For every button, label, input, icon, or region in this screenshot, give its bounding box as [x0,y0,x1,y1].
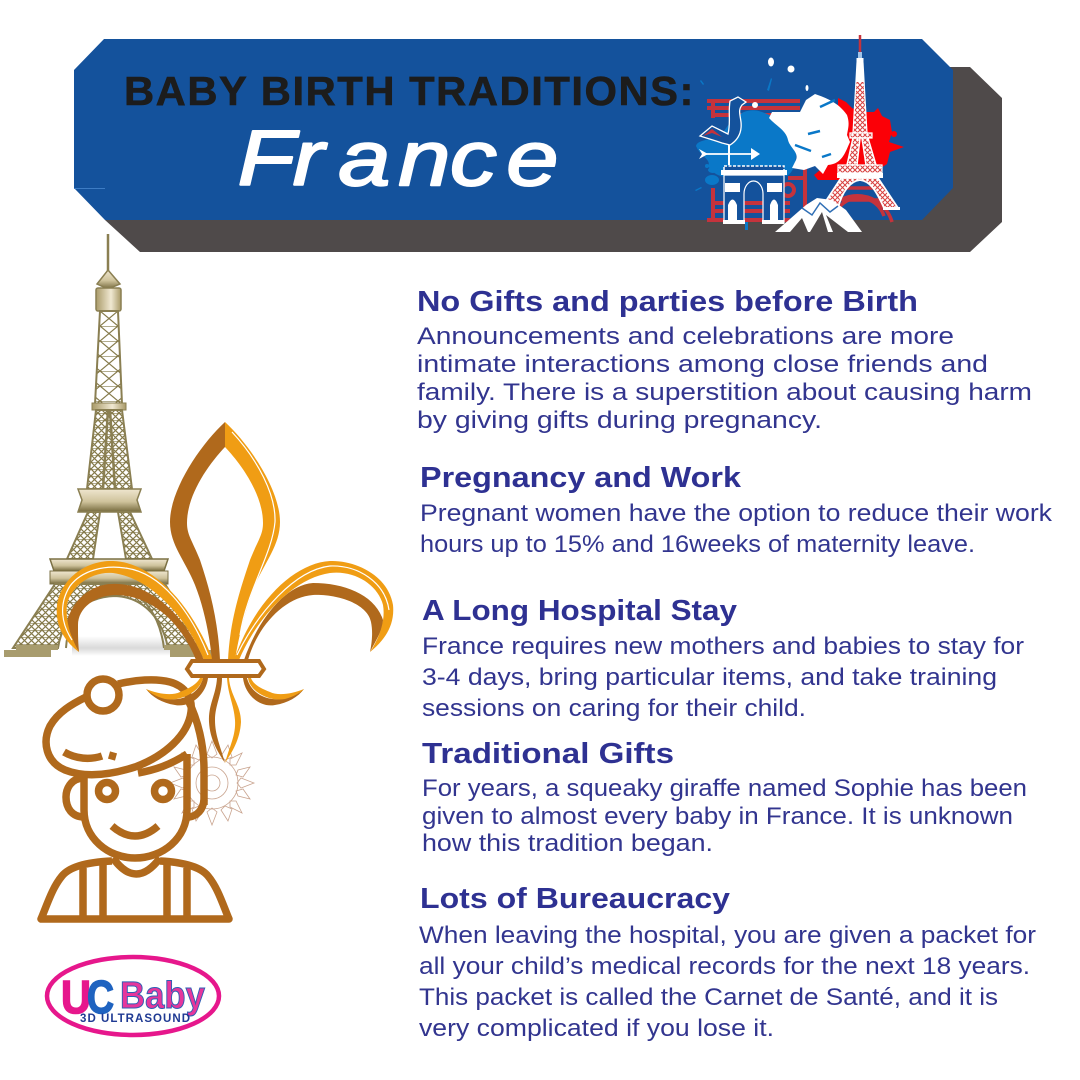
body [422,775,1027,857]
lower drop [209,678,225,763]
logo: UC Baby 3D Ultrasound: C [87,971,114,1023]
body: This packet is called the Carnet de Santé, and it is [419,984,998,1011]
illustration: fleur-de-lis [57,422,393,763]
body: sessions on caring for their child. [422,695,806,722]
body: by giving gifts during pregnancy. [417,407,822,434]
shoulders [41,861,229,919]
banner face [74,39,953,220]
light blue splash [695,78,796,230]
logo Baby: Baby [120,975,205,1017]
heading: A Long Hospital Stay [422,595,737,627]
white splash [752,58,850,174]
body: hours up to 15% and 16weeks of maternity leave. [420,531,975,558]
red line buildings [707,101,892,222]
body: very complicated if you lose it. [419,1015,774,1042]
white Eiffel tower [824,35,900,210]
top petal orange [225,422,280,660]
banner: header ribbon [74,39,1002,252]
hair [138,700,204,805]
mountain [775,198,862,232]
section: pregnancy and work [420,462,1053,558]
body [419,922,1036,1042]
small right curl [243,678,304,705]
top shaft [95,311,122,404]
left curl dark [67,584,204,660]
ears [66,778,204,817]
body: For years, a squeaky giraffe named Sophie has been [422,775,1027,802]
logo: UC Baby 3D Ultrasound [47,957,219,1035]
right curl orange [234,561,393,660]
body: family. There is a superstition about causing harm [417,379,1032,406]
body [422,633,1024,722]
section: no gifts and parties [417,286,1032,434]
rooster weathervane [699,97,760,165]
body: intimate interactions among close friends and [417,351,988,378]
section: traditional gifts [422,738,1027,857]
heading: No Gifts and parties before Birth [417,286,918,318]
body: 3-4 days, bring particular items, and take training [422,664,997,691]
section: a long hospital stay [422,595,1024,722]
small left curl [146,678,208,705]
face [84,754,187,858]
ground shadow [72,636,172,656]
title: France script: France [238,115,558,202]
body: Announcements and celebrations are more [417,323,954,350]
top petal dark [170,422,225,660]
lower arch [13,584,205,648]
feet [4,650,51,657]
illustration: French landmarks splash [695,35,904,232]
section: lots of bureaucracy [419,883,1036,1042]
left curl orange [57,561,213,660]
illustration: boy with beret [41,679,229,919]
body: given to almost every baby in France. It is unknown [422,803,1013,830]
Arc de Triomphe [721,166,787,224]
heading: Pregnancy and Work [420,462,742,494]
heading: Traditional Gifts [422,738,674,770]
heading: Lots of Bureaucracy [420,883,730,915]
smile [112,826,158,836]
banner shadow [105,67,1002,252]
body: all your child’s medical records for the next 18 years. [419,953,1030,980]
illustration: gold Eiffel tower [4,234,215,657]
logo strapline: 3D ULTRASOUND [80,1013,190,1025]
logo UC letters: U [61,971,91,1023]
first platform [50,559,168,571]
body [417,323,1032,434]
body: Pregnant women have the option to reduce their work [420,500,1053,527]
body: When leaving the hospital, you are given a packet for [419,922,1036,949]
spire [107,234,109,272]
beret [46,680,191,775]
second platform [78,489,141,512]
right curl dark [244,583,383,660]
illustration: mandala [170,741,254,825]
body: France requires new mothers and babies to stay for [422,633,1024,660]
red splash [814,98,904,180]
title: baby birth traditions: BABY BIRTH TRADITIONS: [124,68,695,114]
band [187,661,264,676]
body: how this tradition began. [422,830,713,857]
middle shaft [87,410,132,489]
legs [67,512,100,559]
body [420,500,1053,558]
